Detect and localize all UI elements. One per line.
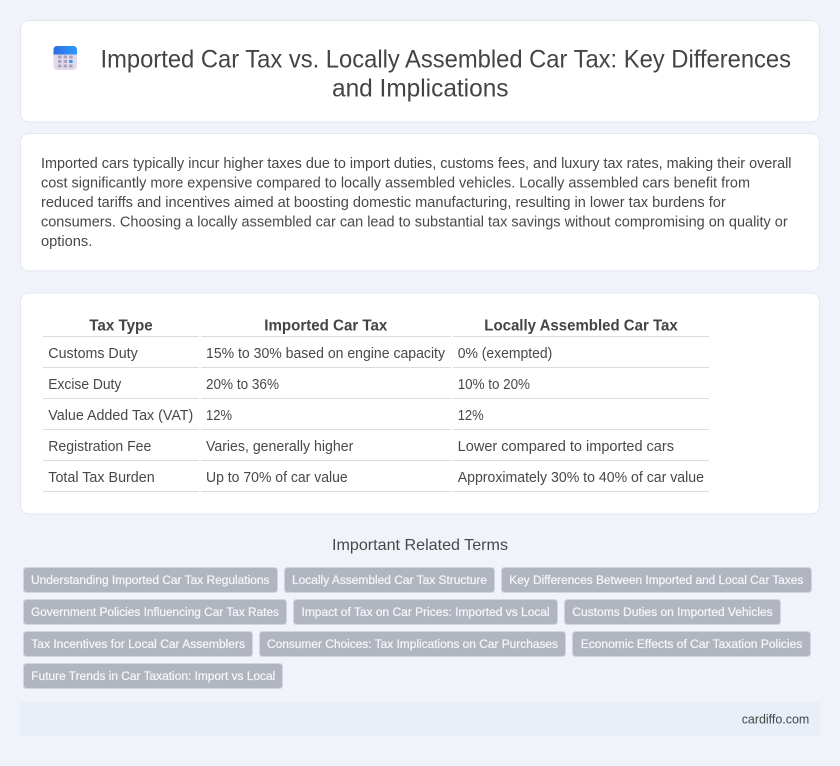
- panel: related term tags: [24, 568, 812, 688]
- tag: Consumer Choices: Tax Implications on Car Purchases: [267, 637, 558, 651]
- table row: customs duty: 0% (exempted): [458, 346, 552, 362]
- table row: excise duty: Excise Duty: [48, 377, 122, 393]
- table row: total tax burden: Approximately 30% to 40% of car value: [458, 470, 704, 486]
- table row: total tax burden: Up to 70% of car value: [206, 470, 348, 486]
- tag: [572, 632, 810, 656]
- table header row: Imported Car Tax: [264, 318, 388, 335]
- panel: tax comparison table: [20, 293, 820, 514]
- tag: [284, 568, 494, 592]
- heading: important related terms: Important Related Terms: [332, 537, 508, 554]
- icon: calendar: [54, 46, 77, 70]
- tag: [564, 600, 780, 624]
- tag: Tax Incentives for Local Car Assemblers: [31, 637, 245, 651]
- panel: summary: [20, 134, 820, 271]
- tag: [24, 600, 286, 624]
- tag: Government Policies Influencing Car Tax Rates: [31, 605, 279, 619]
- text block: summary paragraph: reduced tariffs and incentives aimed at boosting domestic manufacturing, resulting in lower tax burdens for: [41, 195, 726, 211]
- footer: [20, 702, 820, 736]
- text block: summary paragraph: cost significantly more expensive compared to locally assembled vehicles. Locally assembled cars benefit from: [41, 176, 750, 192]
- tag: [24, 568, 278, 592]
- table row: excise duty: 10% to 20%: [458, 377, 530, 393]
- table row: excise duty: 20% to 36%: [206, 377, 279, 393]
- tag: [260, 632, 566, 656]
- table header row: Locally Assembled Car Tax: [484, 318, 678, 335]
- table row: customs duty: Customs Duty: [48, 346, 138, 362]
- text block: summary paragraph: Imported cars typically incur higher taxes due to import duties, customs fees, and luxury tax rates, making their overall: [41, 156, 792, 172]
- table row: registration fee: [43, 439, 709, 461]
- tag: Understanding Imported Car Tax Regulations: [31, 573, 270, 587]
- tag: Key Differences Between Imported and Local Car Taxes: [509, 573, 803, 587]
- table row: value added tax: 12%: [206, 408, 232, 424]
- table row: customs duty: [43, 346, 709, 368]
- table row: excise duty: [43, 377, 709, 399]
- table row: value added tax: Value Added Tax (VAT): [48, 408, 193, 424]
- text block: summary paragraph: options.: [41, 234, 92, 250]
- text block: summary paragraph: consumers. Choosing a locally assembled car can lead to substantial tax savings without compromising on quality or: [41, 214, 788, 230]
- table row: registration fee: Lower compared to imported cars: [458, 439, 674, 455]
- table header row: Tax Type: [89, 318, 153, 335]
- tag: Customs Duties on Imported Vehicles: [572, 605, 773, 619]
- tag: [24, 632, 252, 656]
- table header row: [43, 318, 709, 337]
- tag: Future Trends in Car Taxation: Import vs Local: [31, 669, 275, 683]
- table row: value added tax: 12%: [458, 408, 484, 424]
- table row: value added tax: [43, 408, 709, 430]
- tag: [24, 664, 282, 688]
- footer: cardiffo.com: [742, 711, 809, 726]
- tag: Impact of Tax on Car Prices: Imported vs Local: [302, 605, 550, 619]
- table row: customs duty: 15% to 30% based on engine capacity: [206, 346, 446, 362]
- table row: total tax burden: Total Tax Burden: [48, 470, 155, 486]
- tag: [294, 600, 558, 624]
- panel: title header: [20, 20, 820, 122]
- heading: title: [100, 46, 791, 102]
- table row: registration fee: Varies, generally higher: [206, 439, 353, 455]
- tag: Locally Assembled Car Tax Structure: [292, 573, 487, 587]
- heading: title: Imported Car Tax vs. Locally Assembled Car Tax: Key Differences: [100, 46, 791, 74]
- tag: Economic Effects of Car Taxation Policies: [581, 637, 802, 651]
- tag: [502, 568, 812, 592]
- heading: title: and Implications: [332, 74, 508, 102]
- text block: summary paragraph: [41, 156, 792, 250]
- table row: registration fee: Registration Fee: [48, 439, 151, 455]
- table row: total tax burden: [43, 470, 709, 492]
